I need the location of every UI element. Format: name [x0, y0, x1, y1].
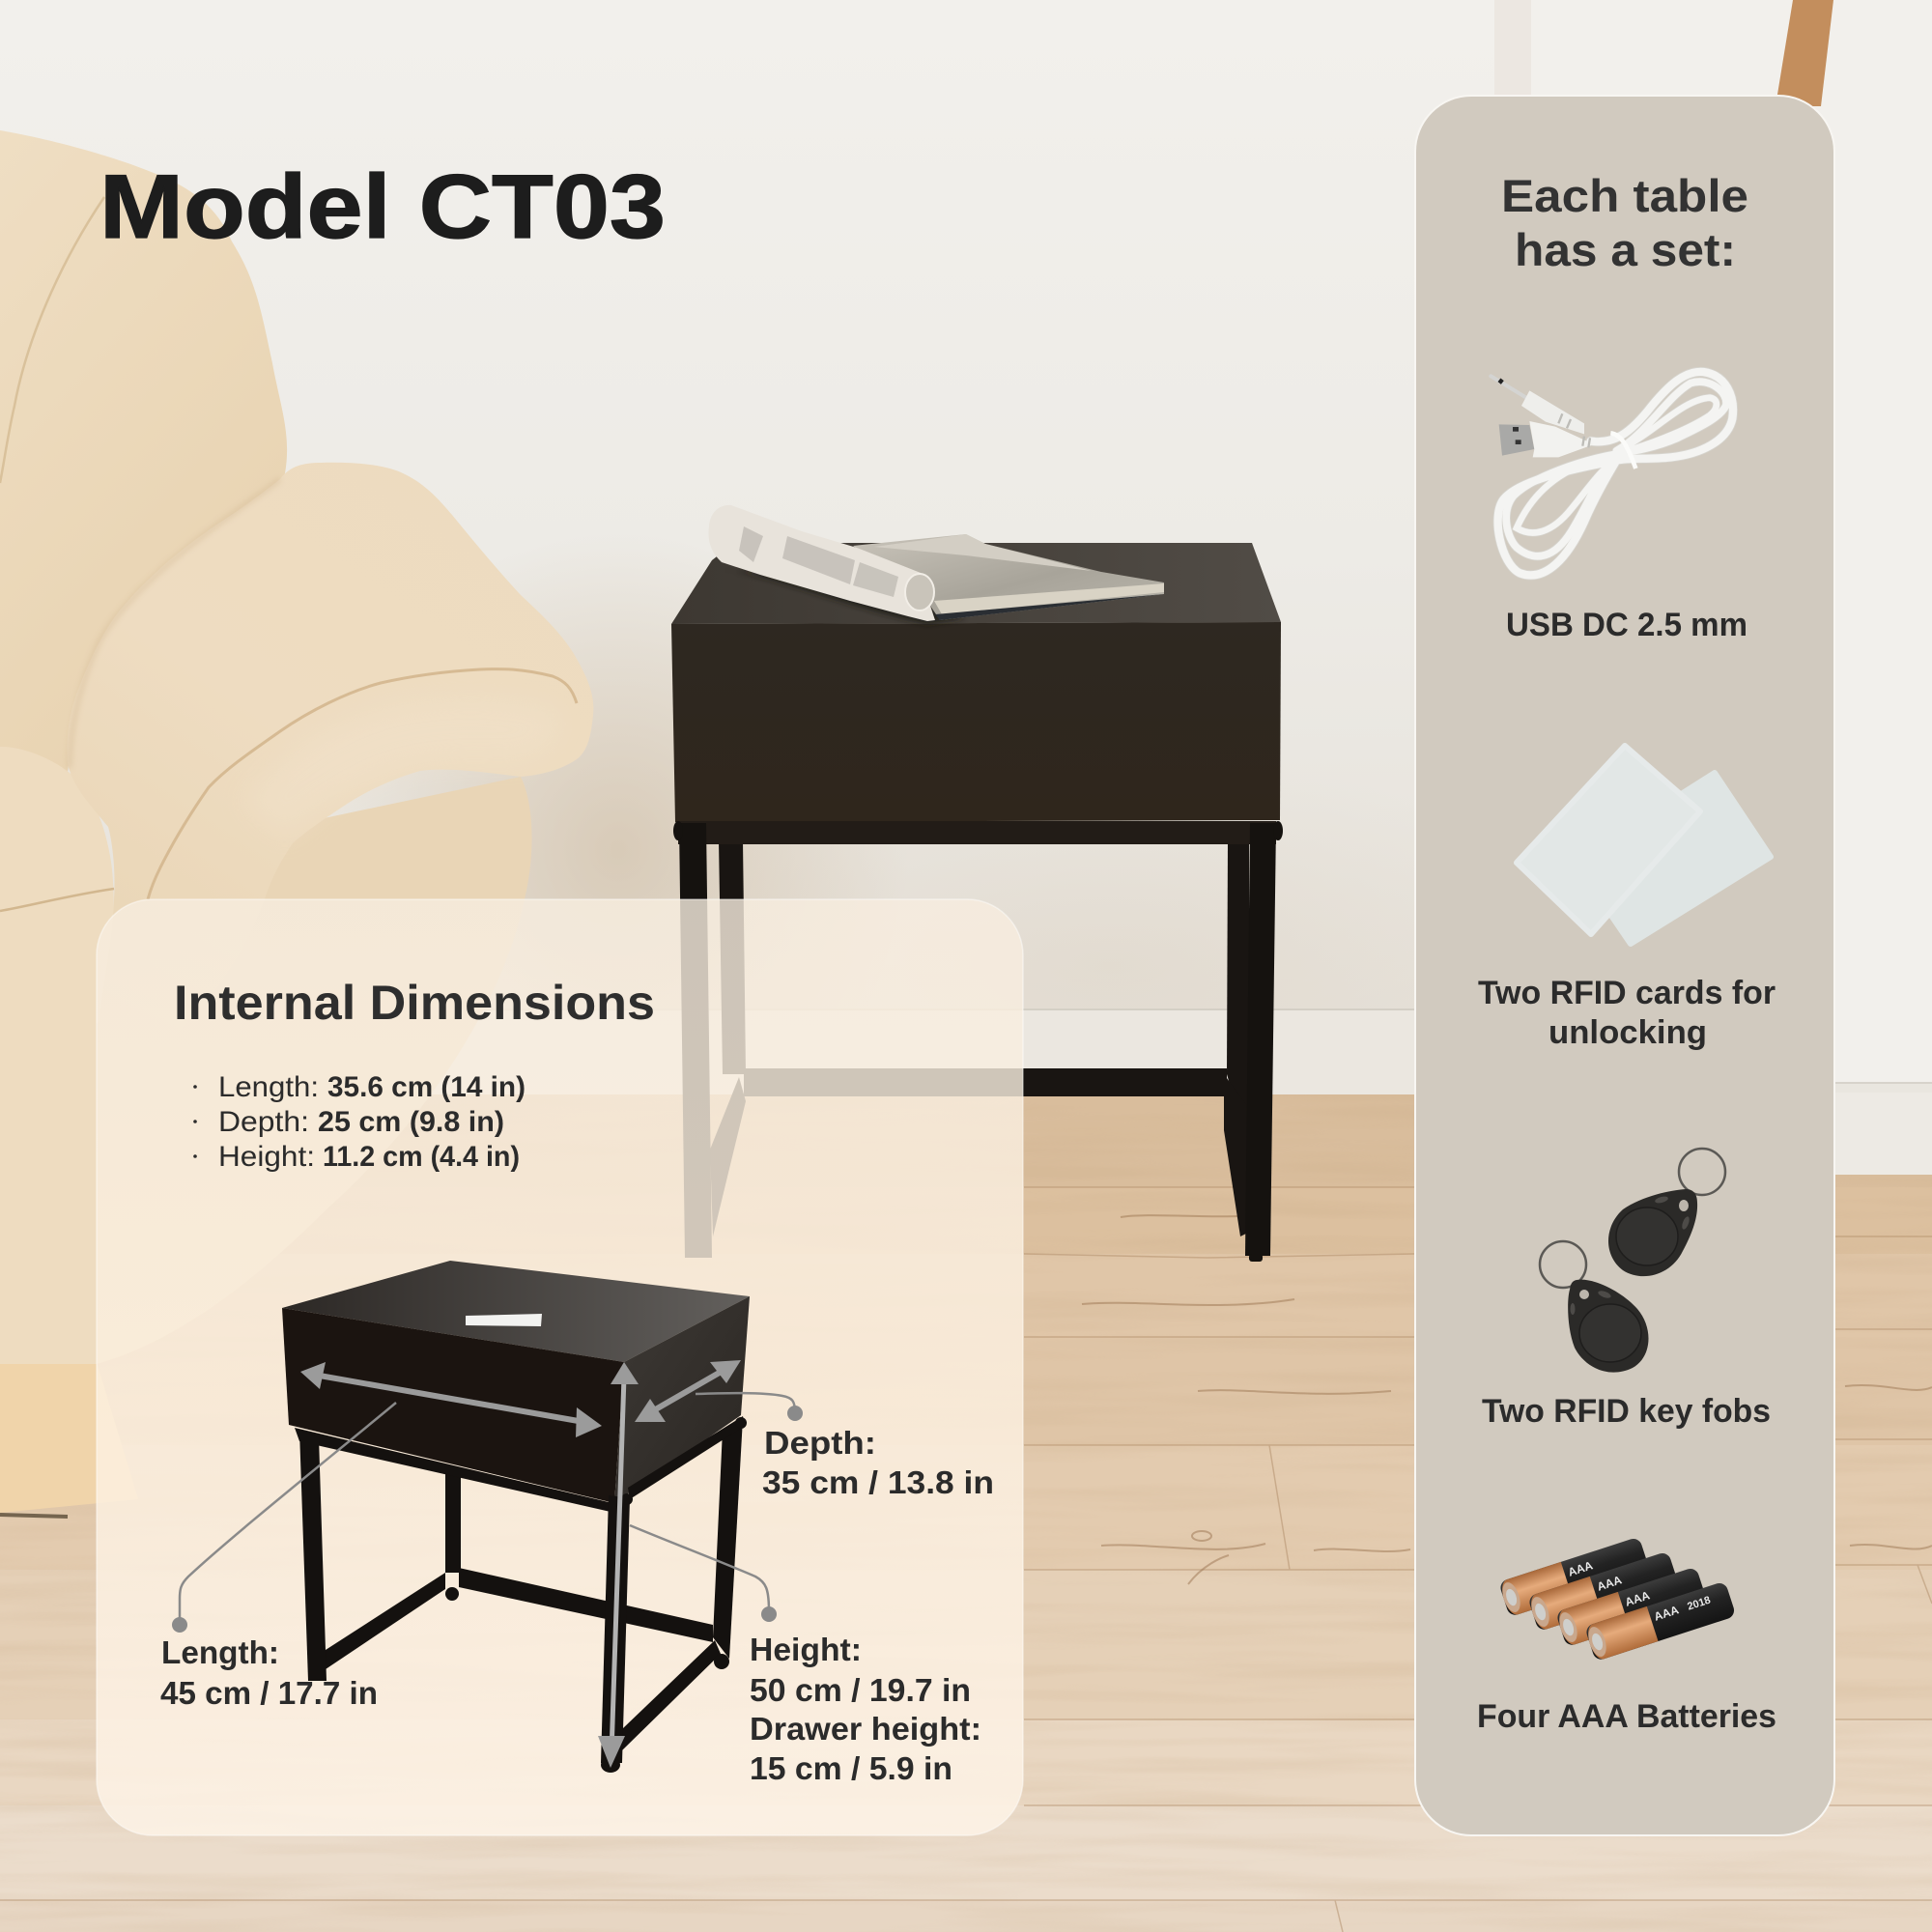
magazine: rolled page — [709, 505, 935, 621]
battery 2: AAA — [1595, 1573, 1624, 1594]
sofa: arm highlight — [242, 697, 561, 840]
battery 3 — [1555, 1567, 1707, 1647]
list item: height: Height: — [218, 1141, 315, 1173]
diagram: white card on top — [466, 1314, 542, 1326]
cable: dc plug — [1491, 376, 1584, 434]
diagram: drawer front — [282, 1308, 624, 1503]
panel: included set background — [1415, 96, 1834, 1835]
table: front legs — [673, 821, 1283, 1262]
label: height and drawer height: 50 cm / 19.7 in — [750, 1672, 971, 1708]
battery 4: AAA — [1652, 1603, 1681, 1624]
card: front — [1517, 746, 1700, 934]
cable: strap — [1610, 433, 1635, 469]
label: height and drawer height: Height: — [750, 1632, 862, 1667]
background: wall — [0, 0, 1932, 1179]
leader: height — [630, 1525, 777, 1622]
dimension diagram: table — [172, 1261, 803, 1773]
label: depth — [762, 1425, 994, 1500]
label: rfid key fobs: Two RFID key fobs — [1482, 1393, 1771, 1430]
diagram: side panel — [614, 1296, 750, 1503]
sofa: seat cushion — [0, 747, 114, 1364]
diagram: top surface — [282, 1261, 750, 1362]
diagram: apron and front legs — [295, 1416, 747, 1773]
fob: lower left — [1540, 1241, 1648, 1373]
arrow: depth — [635, 1360, 741, 1422]
magazine: flat cover — [853, 534, 1164, 620]
sofa: wooden base — [0, 1362, 138, 1517]
leader: depth — [696, 1393, 803, 1421]
table: top surface — [671, 543, 1281, 624]
sofa: arm stitching — [148, 669, 577, 899]
icon: usb dc cable — [1491, 372, 1733, 575]
panel: internal dimensions background — [97, 899, 1023, 1835]
label: rfid cards: Two RFID cards for — [1478, 975, 1776, 1011]
battery 1 — [1498, 1537, 1650, 1617]
magazine: roll hole — [905, 574, 934, 611]
battery 1: AAA — [1566, 1558, 1595, 1579]
leader: length — [172, 1403, 396, 1633]
list item: depth: Depth: — [218, 1106, 309, 1138]
list item: height — [193, 1141, 520, 1173]
table: back legs and stretchers — [710, 840, 1251, 1236]
list item: depth — [193, 1106, 504, 1138]
sofa: crease shadow — [70, 479, 280, 768]
label: depth: Depth: — [764, 1425, 876, 1461]
label: aaa batteries: Four AAA Batteries — [1477, 1698, 1776, 1735]
battery 4: 2018 — [1686, 1595, 1712, 1613]
title: Model CT03 — [99, 156, 666, 257]
sofa: arm — [67, 463, 593, 1051]
fob: upper right — [1608, 1149, 1725, 1276]
table: drawer front — [671, 622, 1281, 822]
label: height and drawer height — [750, 1632, 981, 1786]
list item: depth: 25 cm (9.8 in) — [318, 1106, 504, 1138]
heading: each table has a set: has a set: — [1515, 224, 1736, 275]
label: height and drawer height: 15 cm / 5.9 in — [750, 1750, 952, 1786]
label: rfid cards: unlocking — [1548, 1014, 1707, 1051]
background: wooden floor — [0, 1094, 1932, 1932]
list item: length — [193, 1071, 526, 1103]
arrow: height — [598, 1362, 639, 1768]
heading: internal dimensions: Internal Dimensions — [174, 976, 655, 1030]
magazine: printed text blocks — [739, 526, 898, 597]
cable: usb plug — [1499, 421, 1594, 457]
battery 2 — [1527, 1551, 1679, 1632]
label: length — [160, 1634, 378, 1711]
icon: rfid key fobs — [1540, 1149, 1725, 1373]
label: usb dc: USB DC 2.5 mm — [1506, 607, 1747, 643]
sofa — [0, 130, 593, 1517]
label: rfid cards — [1478, 975, 1776, 1051]
cable: loops — [1498, 372, 1733, 575]
label: length: Length: — [161, 1634, 279, 1670]
magazine: shadow — [724, 570, 966, 624]
background: wooden lamp leg — [1776, 0, 1833, 106]
label: height and drawer height: Drawer height: — [750, 1711, 981, 1747]
battery 3: AAA — [1623, 1588, 1652, 1609]
list item: height: 11.2 cm (4.4 in) — [323, 1141, 520, 1173]
background: right wall and baseboard — [1826, 1082, 1932, 1175]
heading: each table has a set — [1501, 170, 1748, 275]
bedside table in room — [671, 505, 1283, 1262]
list item: length: 35.6 cm (14 in) — [327, 1071, 526, 1103]
internal dimensions list — [193, 1071, 526, 1173]
sofa: back cushion — [0, 130, 287, 773]
list item: length: Length: — [218, 1071, 319, 1103]
arrow: length — [300, 1362, 602, 1437]
icon: rfid cards — [1517, 746, 1771, 944]
icon: aaa batteries — [1498, 1537, 1736, 1662]
card: back — [1575, 773, 1771, 944]
heading: each table has a set: Each table — [1501, 170, 1748, 221]
battery 4 — [1584, 1581, 1736, 1662]
label: length: 45 cm / 17.7 in — [160, 1675, 378, 1711]
table: magazine — [709, 505, 1164, 624]
sofa: lower body — [97, 777, 532, 1364]
diagram: frame rear and stretchers — [326, 1418, 743, 1750]
table: apron — [678, 821, 1276, 844]
label: depth: 35 cm / 13.8 in — [762, 1464, 994, 1500]
